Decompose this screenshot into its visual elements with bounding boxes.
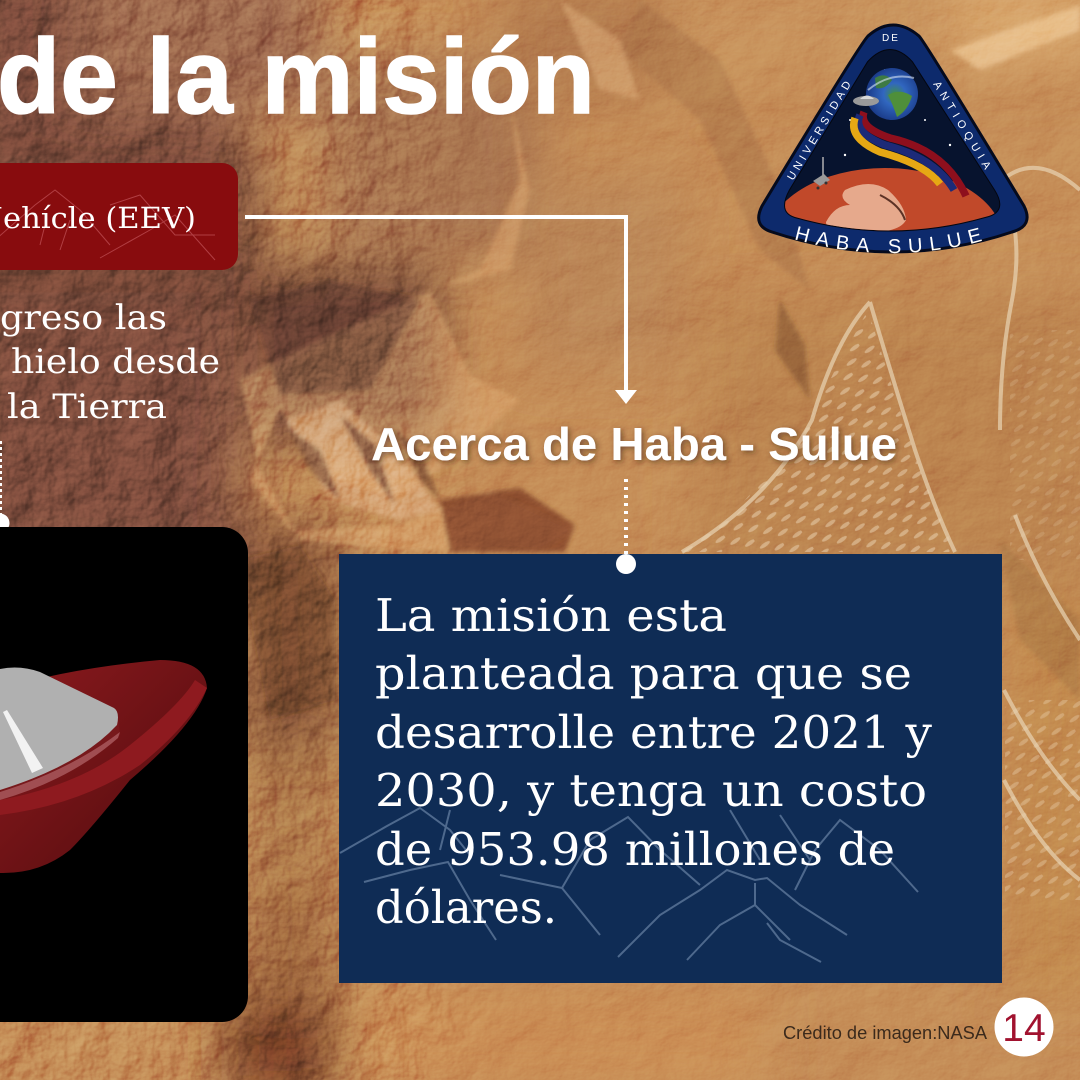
canyon ridges: [240, 0, 1080, 720]
capsule illustration: [0, 660, 207, 873]
capsule and rover: [813, 96, 879, 190]
panel: mission description: [339, 554, 1002, 983]
panel: EEV label: ehícle (EEV): [3, 201, 196, 235]
paragraph: 2030, y tenga un costo: [375, 764, 927, 817]
page number: [994, 998, 1054, 1056]
dotted connector to image panel: [0, 441, 10, 532]
badge: Haba Sulue mission patch: [757, 24, 1029, 254]
earth: [866, 68, 918, 120]
badge lettering: [787, 33, 990, 254]
text block: EEV description: [0, 298, 220, 427]
paragraph: La misión esta: [375, 589, 727, 642]
heading: Acerca de Haba - Sulue: Acerca de Haba - Sulue: [371, 418, 897, 470]
text block: EEV description: greso las: [0, 298, 167, 338]
paragraph: desarrolle entre 2021 y: [375, 706, 933, 759]
paragraph: de 953.98 millones de: [375, 823, 895, 876]
mountains decoration: [340, 808, 918, 962]
image credit: Crédito de imagen:NASA: [783, 1023, 987, 1043]
badge lettering: HABA SULUE: [796, 226, 982, 254]
text block: EEV description: la Tierra: [7, 387, 167, 427]
paragraph: dólares.: [375, 881, 557, 934]
panel: EEV label: [0, 163, 238, 270]
mountains decoration in EEV label: [0, 190, 215, 260]
panel: EEV capsule image: [0, 527, 248, 1022]
badge lettering: UNIVERSIDAD: [787, 82, 850, 180]
badge lettering: DE: [882, 33, 900, 44]
page number: 14: [1002, 1007, 1046, 1050]
patch artwork: [785, 50, 1000, 230]
arrow: EEV to Acerca de Haba-Sulue: [245, 217, 637, 404]
badge lettering: ANTIOQUIA: [933, 82, 990, 170]
paragraph: planteada para que se: [375, 647, 912, 700]
text block: EEV description: hielo desde: [11, 342, 220, 382]
title: de la misión: [0, 18, 595, 136]
paragraph: [375, 589, 933, 934]
dotted connector to description panel: [616, 479, 636, 574]
pale flow landforms on terrain: [682, 168, 1080, 900]
